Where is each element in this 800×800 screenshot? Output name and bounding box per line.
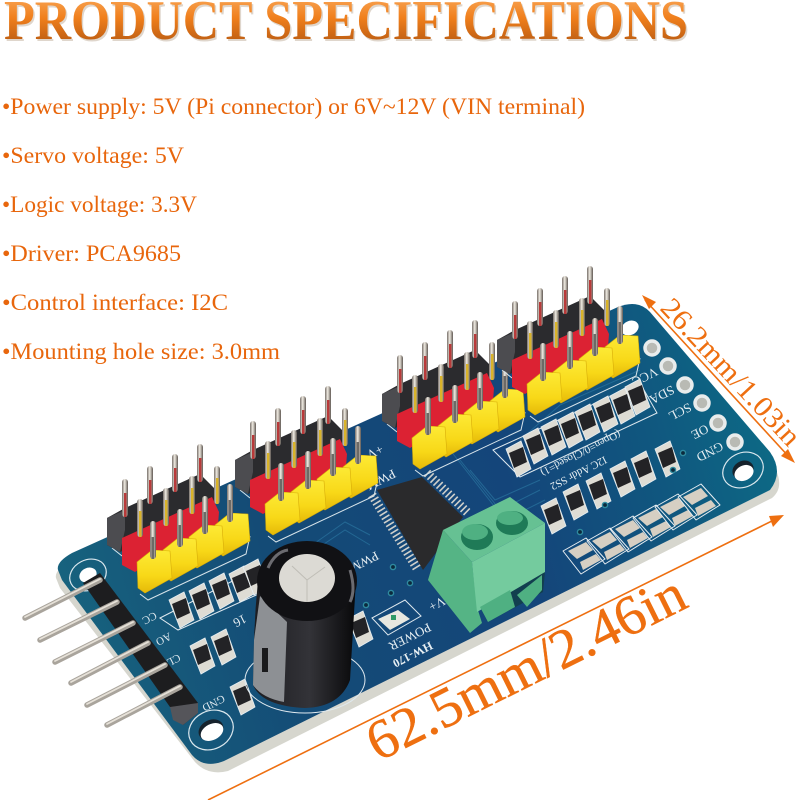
- spec: servo voltage: •Servo voltage: 5V: [2, 143, 184, 168]
- left angled pin header: [25, 573, 198, 725]
- right pad labels: GND: [694, 439, 726, 465]
- dimension: length label: 62.5mm/2.46in: [356, 562, 696, 774]
- pin header group 4: [497, 266, 640, 422]
- pin header group 3: [382, 320, 525, 476]
- right pad labels: VCC: [630, 364, 660, 390]
- mounting holes: [64, 318, 769, 757]
- right pad labels: SCL: [666, 400, 694, 424]
- address label: (Open=0/Closed=1): [538, 427, 622, 478]
- board labels: +V: [364, 442, 386, 463]
- pin header group 1: [107, 444, 250, 600]
- board edge: [56, 310, 779, 772]
- board labels: PWM: [363, 466, 398, 494]
- address label: I2C Addr SS2: [548, 453, 609, 492]
- board labels: PWM: [346, 548, 381, 576]
- board labels: 16: [230, 611, 249, 631]
- jumper pads: [563, 484, 720, 574]
- left pin labels: GND: [200, 692, 227, 713]
- right pad labels: OE: [689, 421, 711, 443]
- left pin labels: CC: [140, 609, 159, 626]
- dimension: length arrow: [208, 515, 784, 800]
- dimension: width label: 26.2mm/1.03in: [654, 292, 800, 453]
- board labels: V+: [426, 594, 448, 614]
- spec: mounting hole: •Mounting hole size: 3.0mm: [2, 339, 280, 364]
- board labels: HW-170: [391, 639, 435, 671]
- left pin labels: CL: [164, 651, 182, 668]
- top resistor row: [493, 379, 657, 477]
- board labels: [230, 442, 448, 671]
- pin header group 2: [235, 386, 378, 542]
- left resistors: [160, 559, 373, 715]
- board labels: POWER: [386, 620, 434, 654]
- vias: [363, 450, 686, 608]
- lower resistor row: [541, 441, 680, 534]
- spec: driver: •Driver: PCA9685: [2, 241, 181, 266]
- green terminal block: [428, 497, 545, 633]
- power LED: [372, 600, 421, 635]
- specification list: [2, 94, 585, 364]
- spec: power supply: •Power supply: 5V (Pi connector) or 6V~12V (VIN terminal): [2, 94, 585, 119]
- left pin labels: AO: [154, 630, 173, 648]
- electrolytic capacitor: [245, 541, 365, 713]
- spec: control interface: •Control interface: I2C: [2, 290, 228, 315]
- IC chip: [372, 473, 468, 570]
- right pad labels: [630, 364, 726, 465]
- spec: logic voltage: •Logic voltage: 3.3V: [2, 192, 197, 217]
- left pin labels: [140, 609, 227, 713]
- right pad labels: SDA: [647, 382, 677, 408]
- product photo: servo driver board: [25, 266, 779, 772]
- dimension: width arrow: [642, 295, 795, 463]
- board surface: [58, 304, 777, 764]
- traces: [300, 370, 640, 560]
- right solder pads: [645, 341, 742, 449]
